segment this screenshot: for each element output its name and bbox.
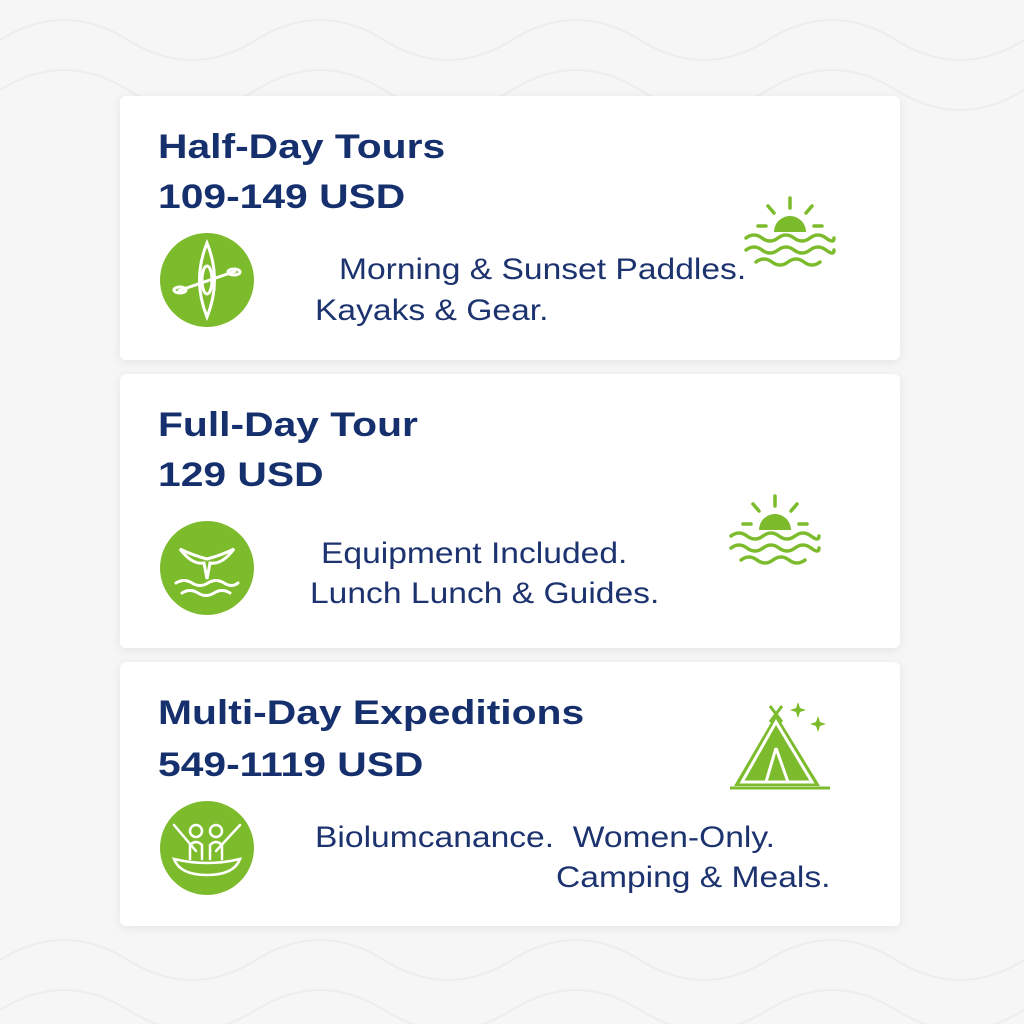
panel: half-day tours: Kayaks & Gear. (315, 294, 548, 327)
heading: full-day tour: Full-Day Tour (158, 406, 418, 444)
icon: whale tail (160, 521, 254, 615)
icon: kayak (160, 233, 254, 327)
icon: sunset (744, 196, 836, 267)
text: description: Biolumcanance. Women-Only. (315, 821, 775, 854)
text: description: Morning & Sunset Paddles. (339, 253, 746, 286)
panel: full-day tour (120, 374, 900, 648)
text: description: Equipment Included. (321, 537, 627, 570)
price: 129 USD: 129 USD (158, 456, 324, 494)
panel: multi-day expeditions: Camping & Meals. (556, 861, 831, 894)
icon: sunset (729, 494, 821, 565)
heading: half-day tours: Half-Day Tours (158, 128, 445, 166)
panel: half-day tours (120, 96, 900, 360)
panel: multi-day expeditions (120, 662, 900, 926)
price: 109-149 USD: 109-149 USD (158, 178, 405, 216)
panel: full-day tour: Lunch Lunch & Guides. (310, 577, 659, 610)
price: 549-1119 USD: 549-1119 USD (158, 746, 423, 784)
heading: multi-day expeditions: Multi-Day Expeditions (158, 694, 584, 732)
icon: tandem kayak (160, 801, 254, 895)
icon: tent (730, 702, 830, 790)
